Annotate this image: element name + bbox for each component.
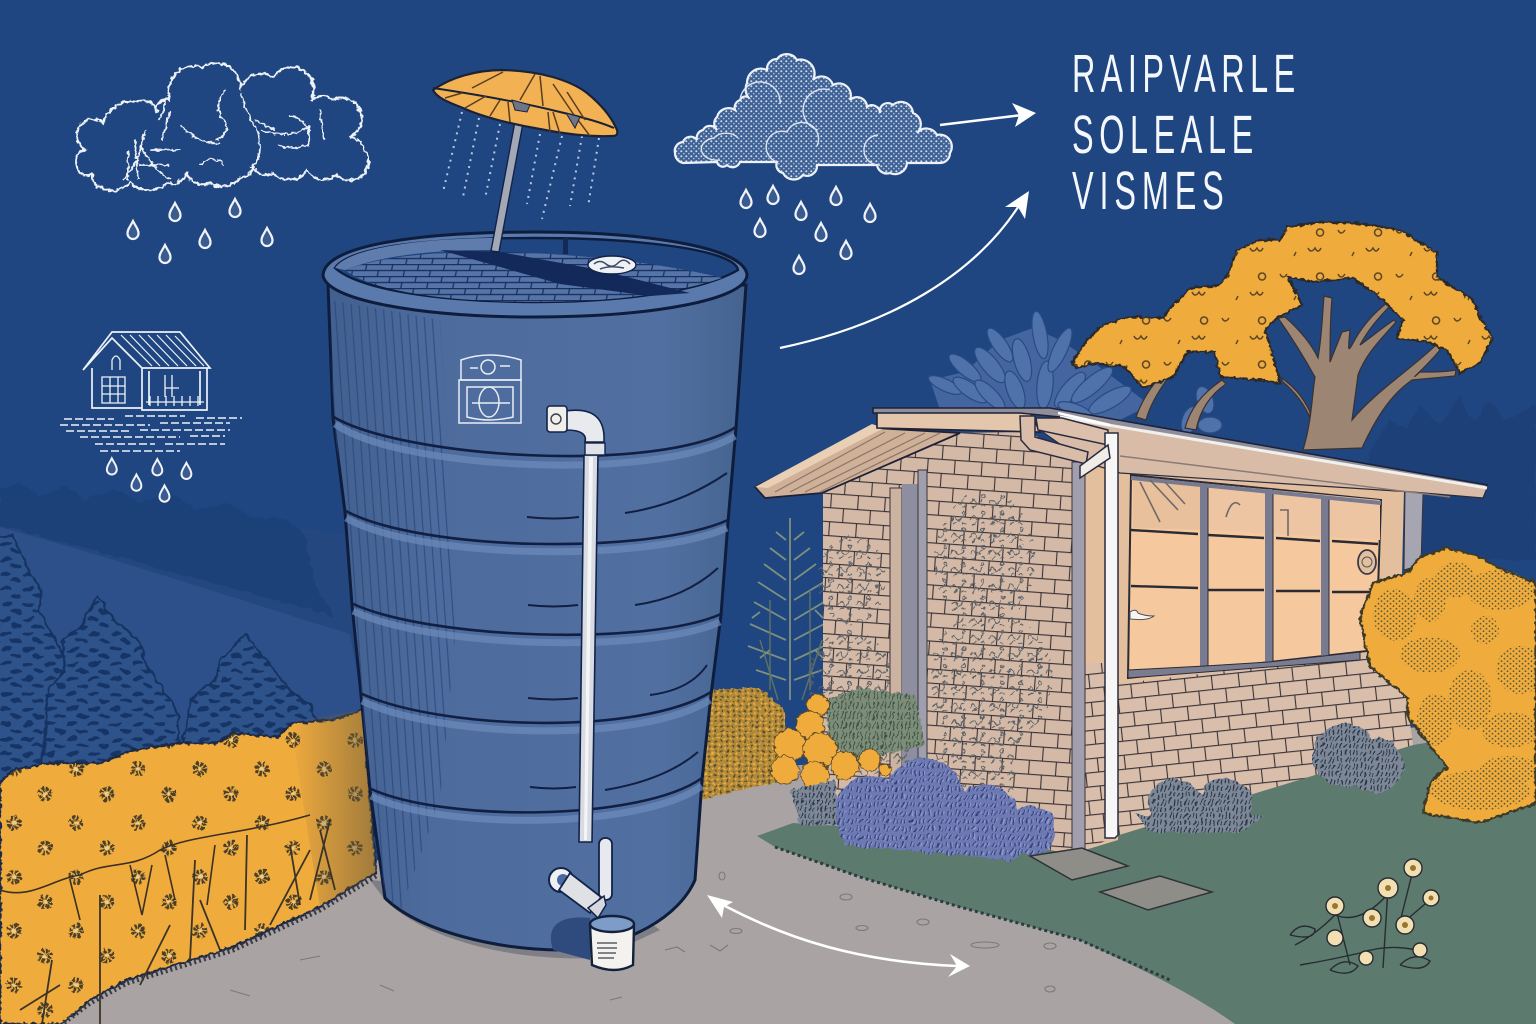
purple shrubs: [835, 758, 1055, 860]
grey bush left of purple: [790, 780, 840, 825]
lid shadow band: [440, 250, 690, 296]
right wall upper cream panel: [1072, 445, 1404, 850]
lower right brick wall: [1116, 650, 1413, 836]
bucket: [590, 916, 634, 970]
shed: [755, 408, 1487, 855]
umbrella rain: [443, 112, 599, 219]
window: [1128, 475, 1381, 678]
dark speckled shrub: [700, 688, 785, 800]
arrow: cloud to title: [940, 103, 1036, 127]
shed left brick wall: [823, 432, 1075, 855]
corner trim: [1072, 462, 1085, 854]
hedge of orange flowers: [0, 710, 376, 1024]
bush speckled patches: [1373, 562, 1536, 810]
roof left eave: [755, 424, 960, 498]
left rain cloud: [76, 63, 369, 191]
canopy markings: [1072, 222, 1493, 388]
tree canopy: [1072, 222, 1493, 388]
tall fern plant beside shed: [748, 518, 824, 700]
rim inner left wall: [335, 238, 495, 270]
double arrow on path: [707, 895, 970, 977]
middle cloud inner lumps: [701, 82, 880, 165]
hedge base grass edge: [62, 876, 376, 1024]
left cloud rain drops: [128, 199, 272, 263]
arrow: barrel to title: [780, 191, 1029, 348]
umbrella pole: [491, 105, 526, 252]
cabin rain drops: [107, 458, 191, 502]
lawn: [757, 725, 1536, 1024]
rain barrel: [323, 232, 747, 970]
tree behind shed: [1072, 222, 1493, 450]
small cabin sketch: [60, 332, 242, 451]
distant hills: [0, 482, 400, 800]
barrel level marks: [527, 473, 727, 790]
barrel lid surface: [345, 252, 722, 302]
hedge lower scrollwork: [0, 815, 310, 920]
title: RAIPVARLE: [1072, 45, 1295, 104]
barrel logo label: [459, 355, 521, 423]
barrel ribs: [332, 416, 736, 812]
window handle: [1130, 610, 1154, 620]
distant right tree silhouettes: [1370, 397, 1536, 560]
grey-blue shrubs: [1135, 723, 1403, 833]
title: SOLEALE: [1072, 106, 1253, 165]
ground pebble marks: [230, 872, 1056, 1000]
stepping stones: [1030, 848, 1212, 910]
spigot and valve: [549, 838, 612, 918]
window medallion: [1358, 550, 1376, 574]
middle cloud rain drops: [740, 186, 876, 274]
right corner trim: [1404, 490, 1423, 570]
lid post: [563, 238, 568, 254]
bucket shadow: [551, 917, 590, 960]
ground path: [0, 720, 1536, 1024]
climbing vines: [808, 490, 1052, 830]
bright orange shrub: [771, 694, 891, 789]
barrel left hatching: [330, 300, 455, 912]
cream flowers: [1290, 859, 1439, 973]
large orange bush right: [1360, 548, 1536, 823]
hedge right shading: [290, 710, 376, 907]
lid vent: [588, 256, 636, 274]
middle stippled cloud: [675, 54, 952, 179]
lower brick beside pipe: [1085, 663, 1116, 850]
gutter and downspout: [1020, 413, 1118, 838]
tree trunks: [1136, 296, 1456, 450]
roof gable fascia: [877, 412, 1040, 432]
umbrella canopy: [433, 70, 617, 136]
vertical pipe: [547, 406, 605, 842]
title: VISMES: [1072, 162, 1224, 221]
hedge grass blades: [20, 820, 335, 1024]
barrel body: [328, 285, 746, 950]
fern fronds behind shed: [926, 310, 1222, 436]
title: [1072, 45, 1295, 221]
pine trees on hillside: [0, 535, 320, 800]
barrel ground shadow: [370, 880, 660, 958]
lawn grass edge: [775, 847, 1170, 980]
barrel rib highlights: [335, 424, 735, 820]
green tuft: [825, 688, 925, 760]
roof top and fascia: [873, 408, 1487, 498]
barrel rim: [323, 232, 747, 317]
left wall door strip: [890, 470, 927, 812]
